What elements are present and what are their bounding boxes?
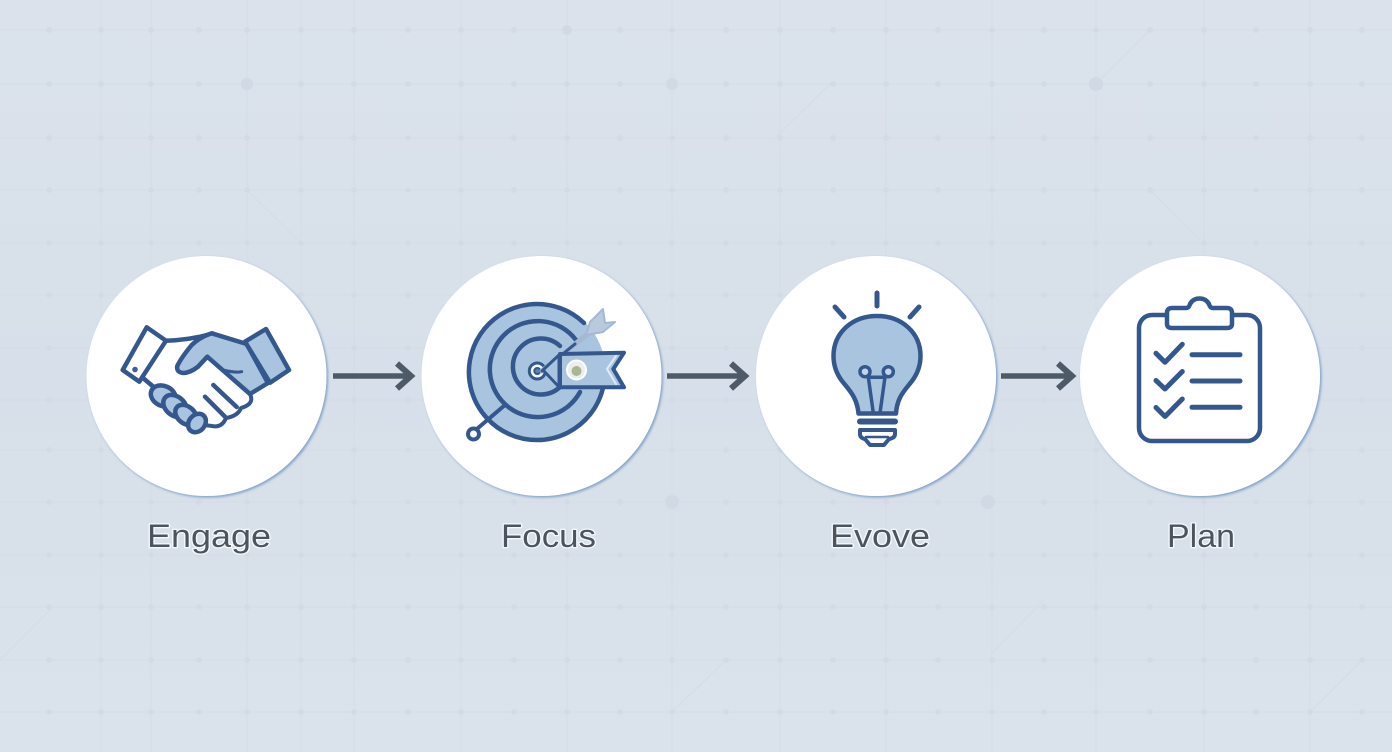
icon: handshake bbox=[123, 327, 289, 436]
step 1: Engage bbox=[86, 256, 326, 496]
step 2: Focus bbox=[422, 256, 662, 496]
step 4: Plan bbox=[1080, 256, 1320, 496]
step 3: Evolve bbox=[756, 256, 996, 496]
circle: Evolve bbox=[756, 256, 996, 496]
label: Plan: Plan bbox=[1167, 518, 1235, 554]
circle: Engage bbox=[86, 256, 326, 496]
arrow: Engage to Focus bbox=[333, 364, 411, 388]
label: Focus: Focus bbox=[501, 518, 596, 554]
icon: light bulb bbox=[834, 293, 920, 445]
label: Evove: Evove bbox=[830, 518, 930, 554]
icon: target with arrow bbox=[468, 303, 624, 440]
icon: clipboard checklist bbox=[1139, 298, 1260, 441]
circle: Plan bbox=[1080, 256, 1320, 496]
arrow: Evolve to Plan bbox=[1001, 364, 1072, 388]
label: Engage: Engage bbox=[147, 518, 271, 554]
circle: Focus bbox=[422, 256, 662, 496]
arrow: Focus to Evolve bbox=[667, 364, 745, 388]
